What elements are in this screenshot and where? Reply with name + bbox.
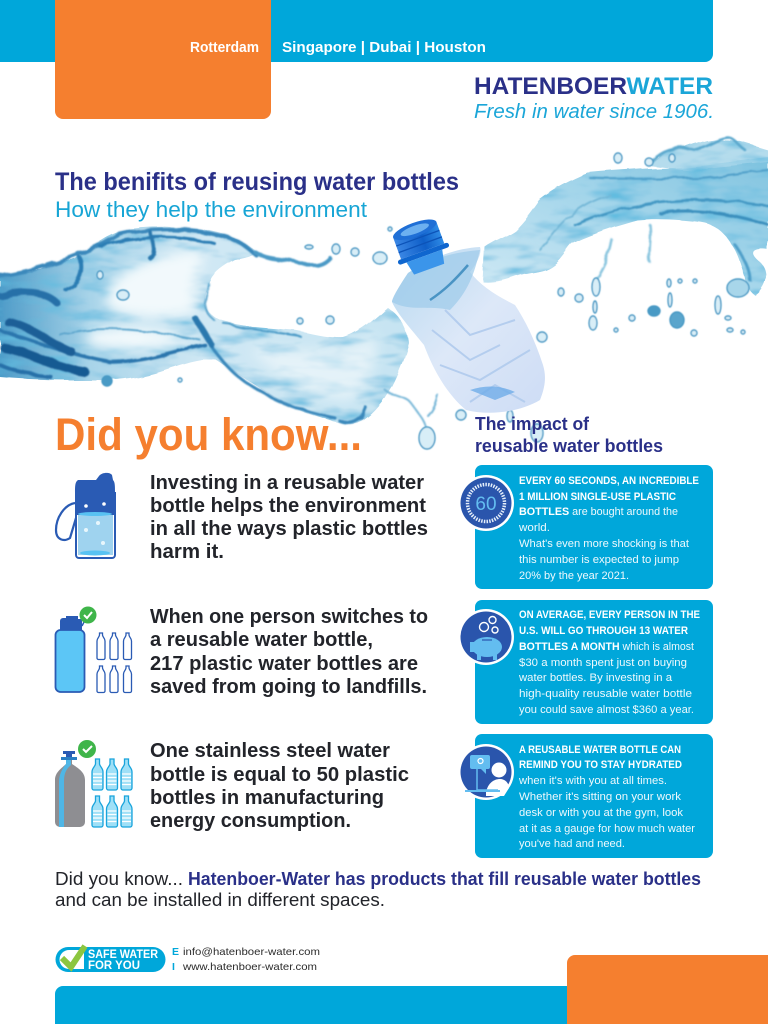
text: one person switches: a reusable water bottle, — [150, 628, 373, 651]
text: stainless steel: One stainless steel water — [150, 739, 390, 762]
text: one person switches: 217 plastic water bottles are — [150, 652, 418, 675]
text: one person switches — [150, 605, 428, 698]
left water mass — [0, 226, 409, 424]
panel text: What's even more shocking is that — [519, 538, 689, 550]
closing statement — [55, 869, 701, 910]
text: stainless steel — [150, 739, 409, 832]
icon: person at desk — [458, 744, 514, 800]
header locations: Rotterdam — [190, 39, 259, 56]
panel text: BOTTLES A MONTH which is almost — [519, 641, 694, 653]
badge: safe water for you: FOR YOU — [88, 960, 140, 972]
crushed plastic bottle — [387, 214, 545, 413]
panel text: high-quality reusable water bottle — [519, 688, 692, 700]
header locations: Singapore | Dubai | Houston — [282, 39, 486, 56]
text: investing: harm it. — [150, 540, 224, 563]
panel: 60 seconds — [458, 465, 713, 589]
panel: cost savings — [458, 600, 713, 724]
panel text: desk or with you at the gym, look — [519, 807, 684, 819]
orange header tab — [55, 0, 271, 119]
contact details: I — [172, 961, 175, 973]
closing statement: and can be installed in different spaces. — [55, 890, 385, 910]
panel text: when it's with you at all times. — [518, 775, 667, 787]
contact details — [172, 946, 320, 973]
text: stainless steel: bottle is equal to 50 plastic — [150, 763, 409, 786]
icon: 60 seconds timer — [458, 475, 514, 531]
bottle cap — [387, 214, 455, 278]
panel text: at it as a gauge for how much water — [519, 823, 695, 835]
panel text: $30 a month spent just on buying — [519, 657, 687, 669]
panel text: EVERY 60 SECONDS, AN INCREDIBLE — [519, 475, 699, 487]
closing statement: Did you know... — [55, 869, 183, 889]
heading: impact — [475, 414, 663, 456]
panel text — [518, 475, 699, 582]
left water dark streaks — [0, 229, 438, 428]
panel text: this number is expected to jump — [519, 554, 679, 566]
text: stainless steel: energy consumption. — [150, 809, 351, 832]
icon: piggy bank — [458, 609, 514, 665]
text: investing: in all the ways plastic bottles — [150, 517, 428, 540]
text: investing: bottle helps the environment — [150, 494, 426, 517]
water droplets — [97, 153, 749, 449]
text: investing — [150, 471, 428, 563]
panel text: 1 MILLION SINGLE-USE PLASTIC — [519, 491, 676, 503]
text: investing: Investing in a reusable water — [150, 471, 424, 494]
panel text: 20% by the year 2021. — [519, 570, 629, 582]
icon: 60 seconds timer: 60 — [475, 494, 497, 515]
panel text: ON AVERAGE, EVERY PERSON IN THE — [519, 609, 700, 621]
panel text: BOTTLES are bought around the — [519, 506, 678, 518]
right water streaks — [540, 138, 768, 280]
water splash with crushed bottle — [0, 138, 768, 449]
panel text: you've had and need. — [519, 838, 625, 850]
footer bar — [55, 986, 768, 1024]
icon: bottle vs six plastic bottles — [56, 606, 132, 692]
panel text: REMIND YOU TO STAY HYDRATED — [519, 759, 682, 771]
contact details: E — [172, 946, 179, 958]
arch highlights — [85, 250, 376, 400]
panel text — [518, 744, 695, 850]
header locations — [190, 39, 486, 56]
panel text: you could save almost $360 a year. — [519, 704, 694, 716]
logo: Fresh in water since 1906. — [474, 101, 714, 123]
panel text: A REUSABLE WATER BOTTLE CAN — [519, 744, 681, 756]
right water band — [483, 139, 768, 295]
contact details: www.hatenboer-water.com — [182, 961, 317, 973]
icon: reusable bottle with strap — [56, 473, 115, 558]
panel text — [518, 609, 700, 716]
panel text: water bottles. By investing in a — [518, 672, 672, 684]
footer orange tab — [567, 955, 768, 1024]
text: one person switches: When one person switches to — [150, 605, 428, 628]
panel text: world. — [518, 522, 550, 534]
text: stainless steel: bottles in manufacturing — [150, 786, 384, 809]
heading: impact: reusable water bottles — [475, 436, 663, 456]
panel text: U.S. WILL GO THROUGH 13 WATER — [519, 625, 688, 637]
logo — [474, 73, 714, 123]
main title: The benifits of reusing water bottles — [55, 168, 459, 196]
panel text: Whether it's sitting on your work — [519, 791, 682, 803]
closing statement: Hatenboer-Water has products that fill reusable water bottles — [188, 869, 701, 889]
heading: did you know: Did you know... — [55, 409, 362, 460]
icon: steel bottle vs six plastic bottles — [55, 740, 132, 827]
text: one person switches: saved from going to landfills. — [150, 675, 427, 698]
logo: HATENBOERWATER — [474, 73, 713, 100]
panel: hydration — [458, 734, 713, 858]
badge: safe water for you — [56, 946, 166, 972]
header bar — [0, 0, 713, 62]
contact details: info@hatenboer-water.com — [183, 946, 320, 958]
subtitle: How they help the environment — [55, 197, 367, 222]
badge: safe water for you: SAFE WATER — [88, 949, 159, 961]
heading: impact: The impact of — [475, 414, 590, 434]
